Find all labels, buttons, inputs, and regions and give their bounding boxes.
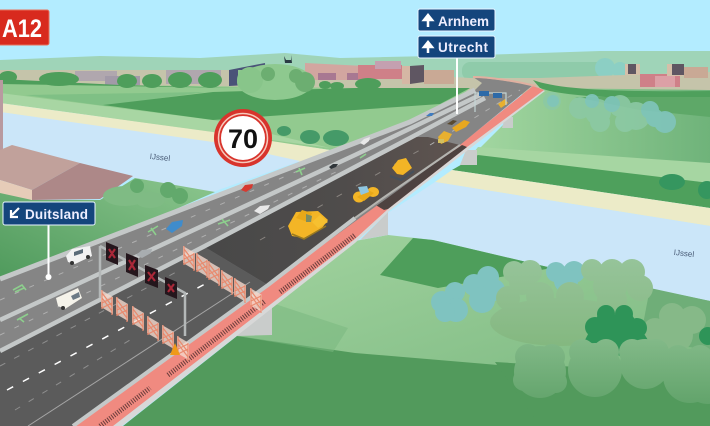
machine: loader [390, 158, 414, 180]
left river [0, 112, 300, 193]
sign Duitsland: Duitsland [25, 207, 88, 222]
main lower carriageway [0, 246, 268, 426]
distant hills [0, 51, 710, 90]
machine: roller [353, 186, 379, 202]
dark strip under works [374, 145, 467, 210]
beige land [0, 70, 710, 96]
green land near building [0, 178, 215, 280]
right land top [478, 88, 710, 165]
machine: paver [288, 210, 328, 239]
road fences front row [101, 290, 174, 350]
lower right land [130, 235, 710, 426]
red strip hatching [100, 235, 355, 426]
left tree line [0, 71, 240, 88]
sign Duitsland [3, 202, 95, 225]
bridge piers [237, 117, 513, 336]
sign Arnhem: Arnhem [438, 14, 489, 29]
matrix sign gantry [100, 242, 185, 336]
dark green tree [585, 305, 710, 356]
speed limit sign 70 [214, 109, 272, 167]
teal bushes [431, 261, 585, 322]
pink buildings centre [305, 61, 454, 84]
dark green foreground [123, 336, 560, 426]
dark car [329, 164, 338, 169]
right light band [470, 147, 710, 183]
brown building [0, 145, 133, 200]
road surface upper carriageway [0, 77, 533, 355]
blue car far [426, 113, 434, 116]
right buildings [625, 64, 708, 87]
vehicles on upper carriageway [56, 113, 434, 310]
right sage bush [643, 303, 706, 353]
red car [241, 184, 253, 192]
machine: truck [447, 120, 470, 132]
bush cluster [431, 259, 710, 404]
tower [0, 80, 3, 155]
outer edge of deck [73, 88, 545, 426]
signpost Arnhem [456, 56, 458, 114]
far road curve [473, 77, 536, 86]
right dark strip [452, 155, 710, 208]
bushes near building [103, 179, 188, 208]
machine: far truck [498, 99, 508, 108]
signpost Duitsland [46, 224, 52, 280]
dark green ring [533, 80, 710, 98]
round trees right [659, 174, 710, 199]
right river [388, 182, 710, 301]
machine: far roller [438, 131, 452, 144]
white car far [360, 137, 370, 145]
green road symbols [13, 154, 366, 322]
sign Arnhem [418, 9, 495, 31]
white car [254, 205, 270, 214]
lane markings [0, 90, 520, 426]
red strip [73, 86, 544, 426]
sign Utrecht [418, 36, 495, 58]
van white [66, 246, 92, 265]
left buildings [75, 63, 266, 88]
blue car [166, 220, 183, 233]
left bushes near road [277, 126, 349, 146]
barriers [0, 90, 485, 426]
far gantry signs [475, 91, 506, 112]
left river bank [0, 103, 330, 162]
dark field lower [380, 238, 552, 288]
far trees behind road [462, 58, 628, 80]
warning triangle [170, 336, 189, 361]
sage bushes [490, 259, 653, 346]
river label right: IJssel [673, 248, 695, 259]
road fences rear row [183, 246, 262, 313]
camper [56, 288, 82, 310]
right river bank [435, 170, 710, 226]
green land left [0, 82, 470, 150]
hill with trees and deer [237, 55, 315, 100]
sky [0, 0, 710, 100]
grey car [136, 249, 152, 258]
river label left: IJssel [149, 152, 171, 163]
teal bushes upper right [543, 92, 676, 133]
lane closed signs [106, 242, 177, 299]
small bushes centre [319, 78, 381, 90]
sign Utrecht: Utrecht [438, 40, 488, 55]
sign A12: A12 [2, 15, 42, 43]
speed limit sign 70: 70 [228, 124, 258, 154]
dark green field [103, 88, 470, 120]
new asphalt [203, 137, 460, 285]
foreground bushes [513, 339, 710, 404]
